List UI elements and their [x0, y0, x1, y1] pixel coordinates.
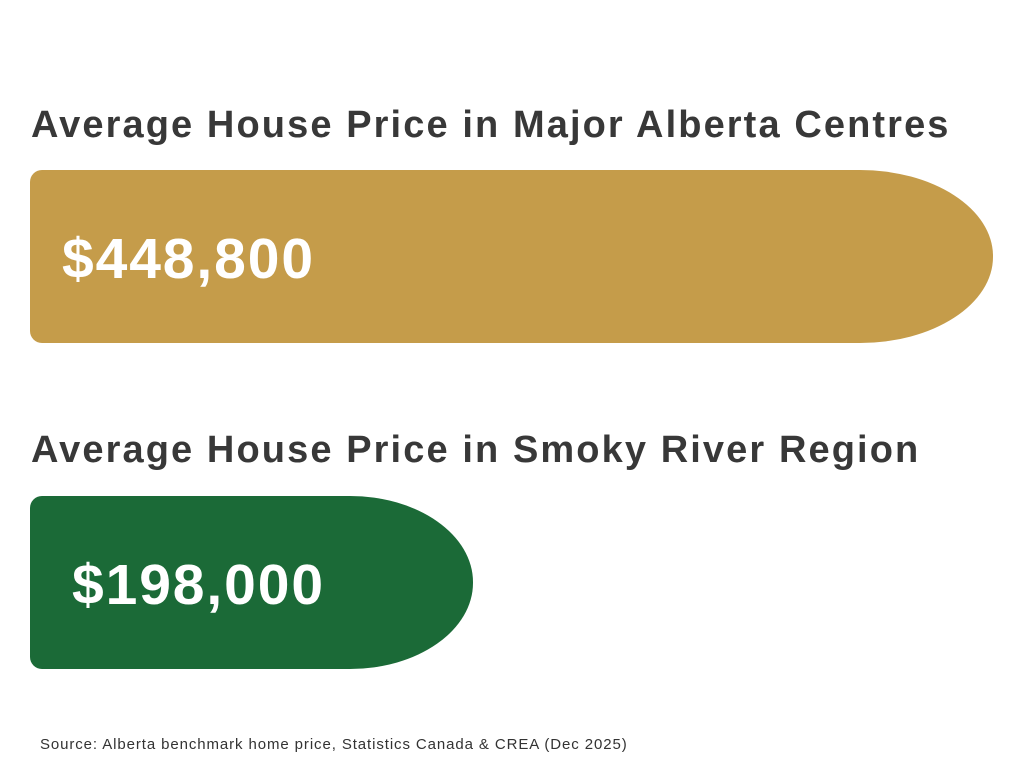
bar: major centres price	[30, 170, 993, 343]
value: 198,000: $198,000	[72, 553, 325, 617]
value: 448,800: $448,800	[62, 227, 315, 291]
source note: Source: Alberta benchmark home price, Statistics Canada & CREA (Dec 2025)	[40, 736, 628, 753]
title: major centres: Average House Price in Major Alberta Centres	[31, 104, 951, 146]
bar: Smoky River price	[30, 496, 473, 669]
title: Smoky River: Average House Price in Smoky River Region	[31, 429, 920, 471]
